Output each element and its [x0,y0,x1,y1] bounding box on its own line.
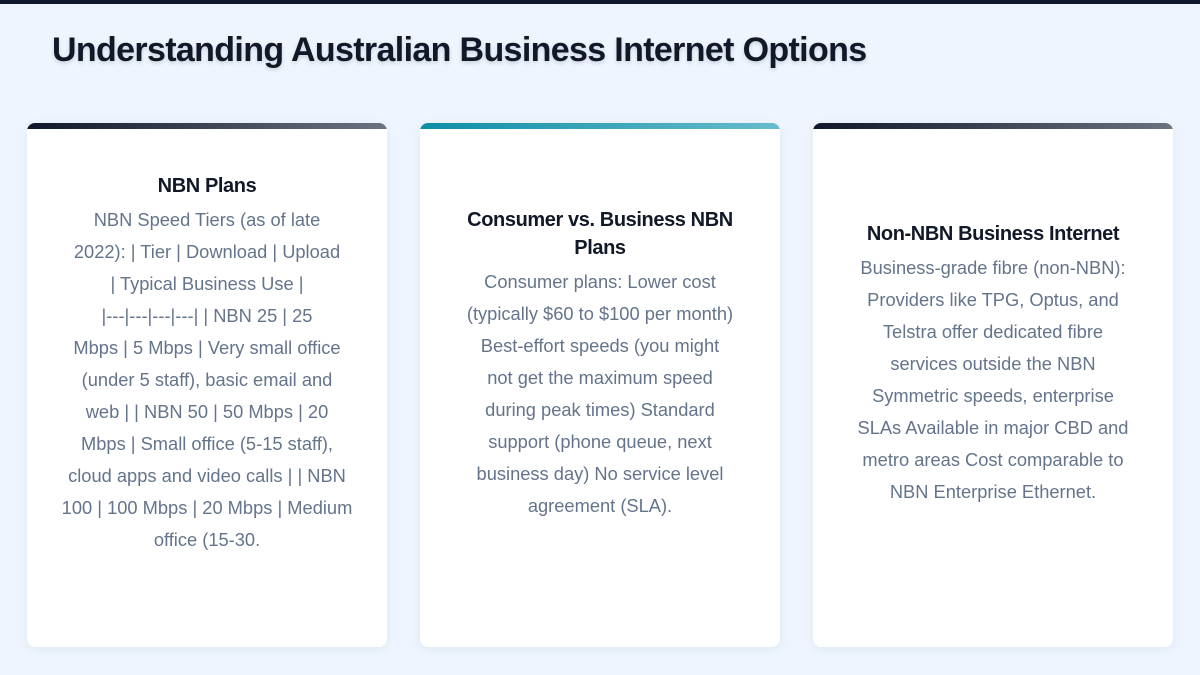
panel: consumer vs business [420,123,780,647]
heading: consumer vs business: Plans [574,237,626,259]
title: Understanding Australian Business Internet Options [52,31,866,69]
text: NBN tiers: web | | NBN 50 | 50 Mbps | 20 [86,401,328,422]
text: business fibre: metro areas Cost comparable to [862,449,1124,470]
heading: non-NBN: Non-NBN Business Internet [867,223,1119,245]
text: NBN tiers: office (15-30. [154,529,260,550]
heading: consumer vs business [467,209,733,259]
text: business fibre: NBN Enterprise Ethernet. [890,481,1096,502]
text: business fibre: Symmetric speeds, enterprise [872,385,1114,406]
text: NBN tiers: NBN Speed Tiers (as of late [94,209,320,230]
text: NBN tiers: Mbps | Small office (5-15 staff), [81,433,333,454]
text: business fibre: Providers like TPG, Optus, and [867,289,1119,310]
text: consumer plans [467,271,733,516]
text: consumer plans: Best-effort speeds (you might [481,335,719,356]
text: business fibre [858,257,1128,502]
text: NBN tiers: |---|---|---|---| | NBN 25 | 25 [102,305,312,326]
text: business fibre: services outside the NBN [890,353,1096,374]
text: consumer plans: agreement (SLA). [528,495,672,516]
text: consumer plans: business day) No service level [477,463,723,484]
text: business fibre: Telstra offer dedicated fibre [883,321,1103,342]
text: consumer plans: during peak times) Standard [485,399,715,420]
text: NBN tiers: | Typical Business Use | [110,273,304,294]
text: consumer plans: Consumer plans: Lower cost [484,271,716,292]
text: NBN tiers: (under 5 staff), basic email and [82,369,332,390]
text: consumer plans: support (phone queue, next [488,431,712,452]
text: business fibre: SLAs Available in major CBD and [858,417,1128,438]
text: NBN tiers: cloud apps and video calls | | NBN [68,465,346,486]
text: consumer plans: (typically $60 to $100 per month) [467,303,733,324]
text: NBN tiers: Mbps | 5 Mbps | Very small office [73,337,341,358]
text: consumer plans: not get the maximum speed [487,367,713,388]
text: NBN tiers: 2022): | Tier | Download | Upload [74,241,340,262]
heading: consumer vs business: Consumer vs. Business NBN [467,209,733,231]
text: NBN tiers: 100 | 100 Mbps | 20 Mbps | Medium [62,497,352,518]
panel: NBN plans [27,123,387,647]
text: business fibre: Business-grade fibre (non-NBN): [860,257,1126,278]
panel: non-NBN [813,123,1173,647]
heading: NBN Plans: NBN Plans [158,175,256,197]
text: NBN tiers [62,209,352,550]
